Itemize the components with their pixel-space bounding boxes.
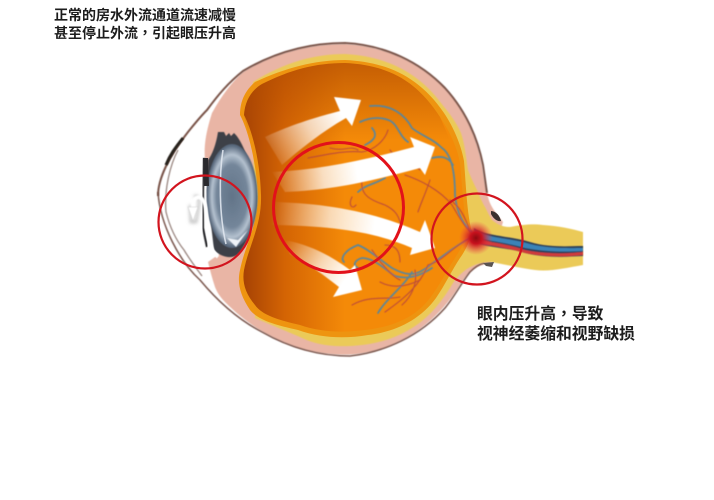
caption: reduced aqueous outflow: [54, 7, 236, 43]
iris and ciliary body: [206, 132, 258, 257]
optic nerve vessels: [474, 228, 583, 257]
optic disc blood pool: [459, 221, 493, 255]
dark nerve sheath detail: [491, 211, 501, 221]
retina yellow layer and optic nerve: [253, 54, 583, 346]
caption: optic nerve damage: 视神经萎缩和视野缺损: [477, 326, 635, 343]
retinal vessels: [308, 106, 472, 313]
dark iris edge: [203, 158, 207, 247]
lens: [206, 144, 258, 248]
cornea inner lines: [166, 138, 183, 165]
arrow 4: [285, 240, 362, 297]
vitreous chamber: [243, 63, 468, 332]
caption: optic nerve damage: 眼内压升高，导致: [477, 301, 603, 324]
choroid orange rim: [239, 60, 472, 337]
red circle: optic nerve: [432, 194, 522, 284]
arrow 1: [265, 97, 361, 165]
sclera outer wall: [205, 44, 503, 355]
red circle: vitreous pressure: [274, 142, 404, 272]
icon: aqueous flow white arrow: [188, 196, 218, 257]
arrow 2: [272, 137, 435, 192]
sclera outline: [158, 43, 487, 196]
red circle: outflow channel: [158, 176, 252, 268]
caption: reduced aqueous outflow: 正常的房水外流通道流速减慢: [54, 7, 236, 23]
arrows showing raised pressure: [265, 97, 435, 297]
caption: optic nerve damage: [477, 301, 635, 343]
caption: reduced aqueous outflow: 甚至停止外流，引起眼压升高: [54, 23, 236, 43]
arrow 3: [272, 202, 435, 255]
